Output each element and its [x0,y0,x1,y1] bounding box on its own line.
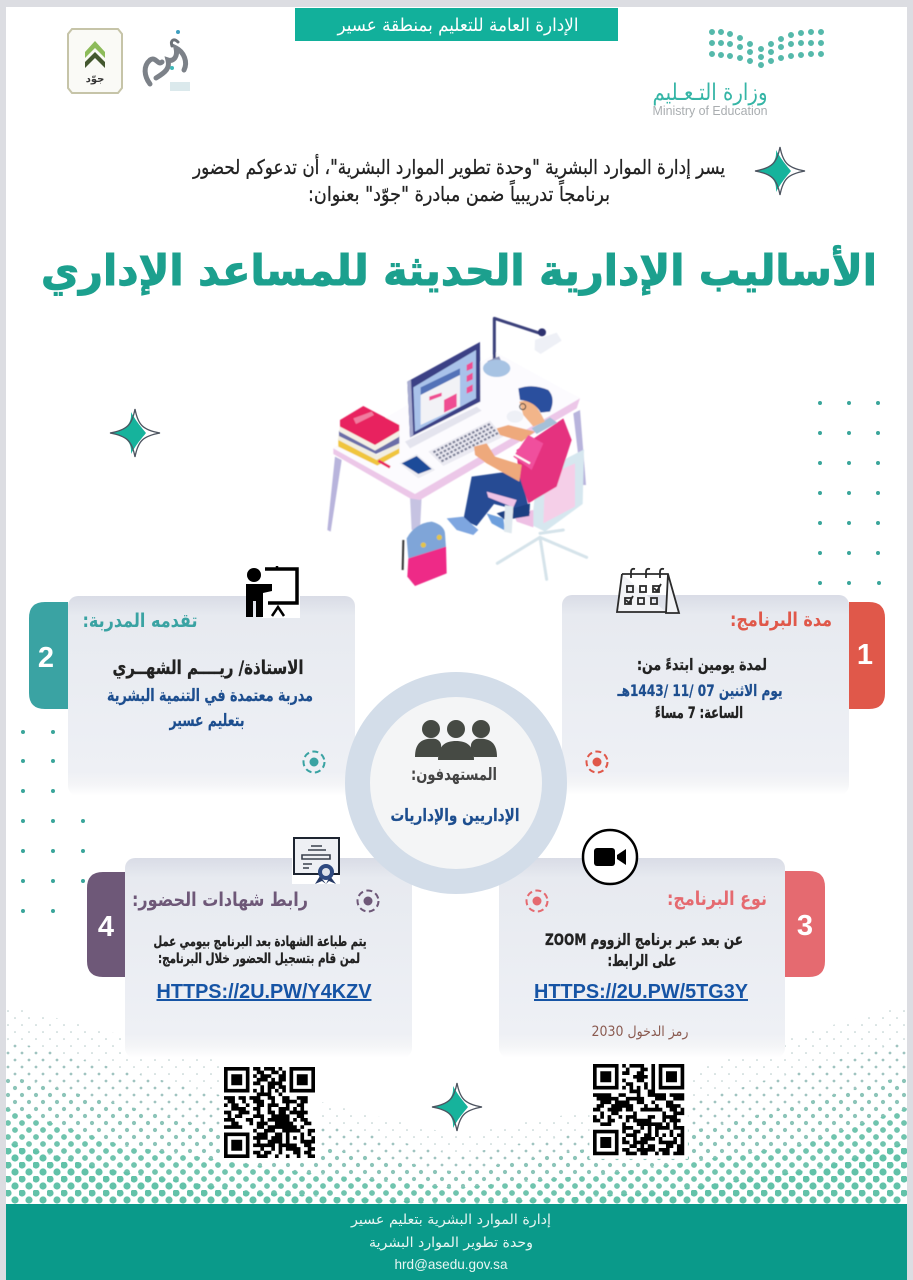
target audience circle: الإداريين والإداريات [390,806,520,826]
panel 3: program type: HTTPS://2U.PW/5TG3Y [534,981,749,1003]
intro text: يسر إدارة الموارد البشرية "وحدة تطوير الموارد البشرية"، أن تدعوكم لحضور [192,154,725,180]
panel 1: duration: مدة البرنامج: [730,609,832,631]
panel 2: trainer: تقدمه المدربة: [82,610,198,632]
tab 3 [785,871,825,977]
footer: إدارة الموارد البشرية بتعليم عسير [350,1212,551,1228]
intro text: برنامجاً تدريبياً ضمن مبادرة "جوّد" بعنوان: [308,180,610,206]
panel 2: trainer: مدربة معتمدة في التنمية البشرية [107,686,313,706]
tab 1: 1 [857,639,873,671]
logo: calligraphy [145,30,190,91]
logo: Ministry of Education [652,32,821,118]
panel 3: program type: عن بعد عبر برنامج الزووم ZOOM [545,930,743,949]
icon: star top [755,147,805,195]
panel 1: duration: لمدة يومين ابتدءً من: [637,655,767,674]
title: الأساليب الإدارية الحديثة للمساعد الإداري [41,245,877,295]
tab 2: 2 [38,642,54,674]
footer: وحدة تطوير الموارد البشرية [369,1235,533,1251]
dots right [820,403,879,583]
target audience circle [358,684,554,882]
intro text [192,154,725,206]
illustration: person at desk [327,318,587,586]
logo: Jawd: جوّد [86,74,104,85]
QR code left [220,1063,319,1162]
panel 2: trainer: بتعليم عسير [169,711,244,731]
icon: people [415,720,497,760]
icon: presenter [246,566,300,618]
logo: Jawd [68,29,122,93]
panel 2: trainer [29,596,355,796]
panel 4: certificates [87,858,412,1058]
panel 1: duration [562,595,885,795]
banner: education administration: الإدارة العامة للتعليم بمنطقة عسير [337,15,578,36]
icon: star bottom [432,1083,482,1131]
panel 3: program type: رمز الدخول 2030 [592,1024,688,1040]
logo: Ministry of Education: وزارة التـعـليم [652,80,768,106]
tab 4 [87,872,125,977]
footer [6,1204,907,1280]
panel 4: certificates: لمن قام بتسجيل الحضور خلال البرنامج: [158,951,360,967]
panel 4: certificates: رابط شهادات الحضور: [132,889,308,911]
icon: calendar [617,569,679,613]
target audience circle: المستهدفون: [411,765,497,785]
tab 1 [849,602,885,709]
icon: certificate [292,836,340,884]
tab 3: 3 [797,910,813,942]
logo: Ministry of Education: Ministry of Education [652,103,768,118]
footer: hrd@asedu.gov.sa [394,1256,508,1272]
QR code right [589,1060,688,1159]
panel 3: program type [499,858,825,1058]
banner: education administration [295,8,618,41]
chair base [497,530,587,579]
tab 2 [29,602,68,709]
icon: video camera [583,830,637,884]
panel 3: program type: على الرابط: [608,951,676,970]
panel 1: duration: يوم الاثنين 07 /11 /1443هـ [617,681,782,700]
panel 1: duration: الساعة: 7 مساءً [655,703,743,722]
dots left [23,732,83,911]
panel 4: certificates: يتم طباعة الشهادة بعد البرنامج بيومي عمل [154,934,366,950]
icon: star left [110,409,160,457]
tab 4: 4 [98,911,114,943]
halftone dot background [6,1005,907,1204]
panel 3: program type: نوع البرنامج: [667,888,767,910]
panel 4: certificates: HTTPS://2U.PW/Y4KZV [156,981,372,1003]
panel 2: trainer: الاستاذة/ ريــــم الشهــري [112,657,304,680]
